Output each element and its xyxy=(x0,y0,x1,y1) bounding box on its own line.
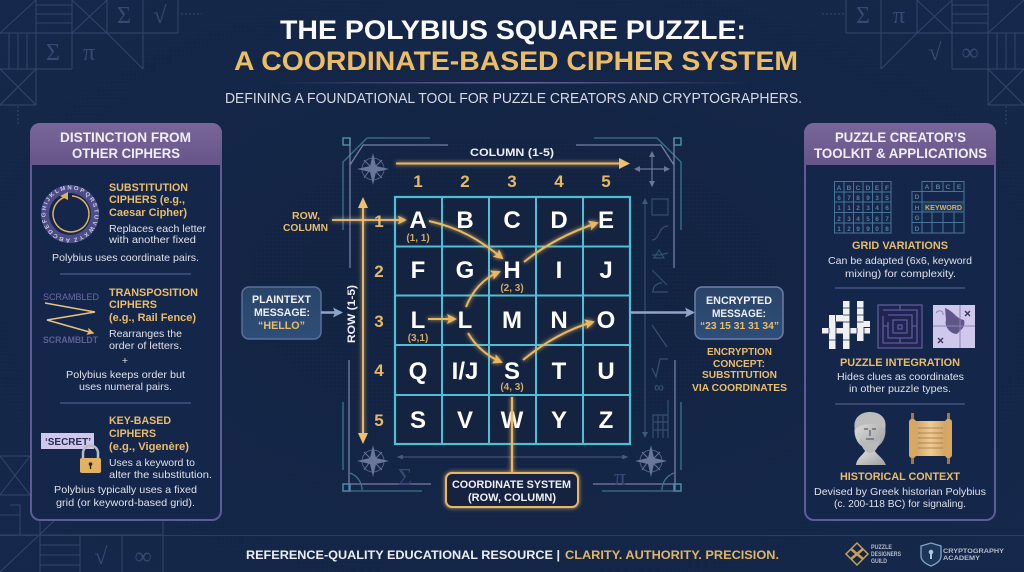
grid letters: C xyxy=(503,207,521,234)
subtitle: DEFINING A FOUNDATIONAL TOOL FOR PUZZLE CREATORS AND CRYPTOGRAPHERS. xyxy=(225,91,802,107)
grid letters: H xyxy=(503,257,521,284)
coordinate labels xyxy=(406,233,524,393)
panel header xyxy=(804,123,996,165)
icon: 6x6 grid: F xyxy=(885,185,889,192)
puzzle integration text: in other puzzle types. xyxy=(849,383,951,395)
icon: keyword grid: C xyxy=(946,184,951,191)
icon: 6x6 grid: 7 xyxy=(885,216,889,223)
coordinate system callout xyxy=(446,397,578,507)
encrypted message box: “23 15 31 31 34” xyxy=(700,320,779,332)
logo: cryptography academy: ACADEMY xyxy=(943,555,981,562)
historical context text: (c. 200-118 BC) for signaling. xyxy=(834,498,966,510)
grid letters: S xyxy=(410,407,426,434)
icon: 6x6 grid: 3 xyxy=(866,205,870,212)
row numbers: 2 xyxy=(374,262,384,281)
icon: secret keyword and padlock xyxy=(41,433,101,473)
column numbers xyxy=(413,172,611,191)
icon: 6x6 grid: 7 xyxy=(847,195,851,202)
panel header xyxy=(30,123,222,165)
icon: crossword xyxy=(822,301,870,349)
panel header: PUZZLE CREATOR’S xyxy=(835,129,966,145)
key-based ciphers text: alter the substitution. xyxy=(109,469,212,481)
icon: keyword grid: E xyxy=(957,184,962,191)
grid letters: U xyxy=(597,358,615,385)
icon: 6x6 grid: 5 xyxy=(866,216,870,223)
grid letters: B xyxy=(456,207,474,234)
title xyxy=(234,15,798,76)
corner pattern: bottom left xyxy=(0,456,163,572)
icon: 6x6 grid: 1 xyxy=(837,205,841,212)
logo: cryptography academy xyxy=(921,543,1005,566)
icon: keyword grid: A xyxy=(925,184,930,191)
coordinate labels: (3,1) xyxy=(408,333,428,344)
transposition ciphers text: uses numeral pairs. xyxy=(79,381,172,393)
icon: keyword grid: KEYWORD xyxy=(925,205,962,212)
logo: puzzle designers guild xyxy=(846,543,902,565)
icon: 6x6 grid: E xyxy=(875,185,880,192)
icon: 6x6 grid: 6 xyxy=(837,195,841,202)
row axis: ROW (1-5) xyxy=(346,285,358,343)
panel header: DISTINCTION FROM xyxy=(60,129,191,145)
key-based ciphers text: Uses a keyword to xyxy=(109,457,195,469)
row numbers xyxy=(374,212,384,430)
row numbers: 1 xyxy=(374,212,384,231)
grid letters xyxy=(409,207,615,434)
plaintext message box: PLAINTEXT xyxy=(252,294,311,306)
panel header: OTHER CIPHERS xyxy=(72,145,180,161)
footer tagline: REFERENCE-QUALITY EDUCATIONAL RESOURCE | xyxy=(246,548,560,562)
encryption concept text: SUBSTITUTION xyxy=(702,369,777,381)
row, column pointer: COLUMN xyxy=(283,222,328,234)
encrypted message box: ENCRYPTED xyxy=(706,295,772,307)
icon: 6x6 grid xyxy=(834,182,891,233)
corner pattern: top left xyxy=(0,0,202,124)
coordinate labels: (4, 3) xyxy=(500,382,524,393)
transposition ciphers text xyxy=(66,287,198,393)
row, column pointer xyxy=(283,210,405,234)
grid letters: Q xyxy=(409,358,427,385)
plaintext message box: “HELLO” xyxy=(258,320,305,332)
column numbers: 1 xyxy=(413,172,423,191)
icon: secret keyword and padlock: ‘SECRET’ xyxy=(45,436,91,448)
logo: cryptography academy: CRYPTOGRAPHY xyxy=(943,548,1005,555)
grid letters: O xyxy=(597,307,615,334)
historical context text xyxy=(814,471,986,510)
corner pattern: top right xyxy=(822,0,1024,124)
icon: keyword grid: H xyxy=(915,205,920,212)
encrypted message box xyxy=(695,287,783,339)
key-based ciphers text: grid (or keyword-based grid). xyxy=(56,497,195,509)
icon: compass top left xyxy=(357,153,389,185)
decorative frame around grid: Σ xyxy=(398,465,412,491)
icon: 6x6 grid: 6 xyxy=(885,205,889,212)
icon: keyword grid: G xyxy=(914,215,920,222)
grid letters: F xyxy=(411,257,425,284)
icon: rail fence zigzag xyxy=(43,292,99,345)
coordinate labels: (1, 1) xyxy=(406,233,430,244)
logo: puzzle designers guild: GUILD xyxy=(871,558,887,565)
icon: 6x6 grid: 3 xyxy=(875,195,879,202)
historical context text: Devised by Greek historian Polybius xyxy=(814,486,986,498)
encryption path arrows xyxy=(428,221,597,362)
logo: puzzle designers guild: PUZZLE xyxy=(871,544,893,551)
grid letters: W xyxy=(501,407,524,434)
substitution ciphers text: SUBSTITUTION xyxy=(109,182,188,194)
icon: 6x6 grid: 2 xyxy=(837,216,841,223)
icon: 6x6 grid: A xyxy=(837,185,842,192)
grid letters: I xyxy=(556,257,562,284)
grid letters: G xyxy=(456,257,474,284)
icon: rail fence zigzag: SCRAMBLDT xyxy=(43,335,98,345)
corner pattern: top right: π xyxy=(893,3,905,29)
key-based ciphers text: Polybius typically uses a fixed xyxy=(54,484,197,496)
substitution ciphers text xyxy=(52,182,206,264)
icon: keyword grid xyxy=(912,182,964,233)
decorative frame around grid xyxy=(343,138,681,491)
transposition ciphers text: order of letters. xyxy=(109,340,182,352)
icon: keyword grid: D xyxy=(915,226,920,233)
grid letters: T xyxy=(552,358,567,385)
polybius grid xyxy=(395,197,630,444)
plaintext message box xyxy=(242,287,321,339)
substitution ciphers text: Polybius uses coordinate pairs. xyxy=(52,252,199,264)
grid letters: D xyxy=(550,207,568,234)
panel: puzzle creator's toolkit xyxy=(804,123,996,520)
icon: compass bottom left xyxy=(357,445,389,477)
icon: 6x6 grid: 1 xyxy=(837,226,841,233)
encryption concept text: CONCEPT: xyxy=(713,358,765,370)
puzzle integration text: Hides clues as coordinates xyxy=(837,371,964,383)
grid letters: Y xyxy=(551,407,567,434)
corner pattern: top right: √ xyxy=(928,40,942,66)
column axis xyxy=(396,147,630,169)
row numbers: 5 xyxy=(374,411,384,430)
icon: 6x6 grid: C xyxy=(856,185,861,192)
icon: keyword grid: D xyxy=(915,194,920,201)
row numbers: 3 xyxy=(374,312,384,331)
grid variations text: Can be adapted (6x6, keyword xyxy=(828,255,972,267)
footer tagline: CLARITY. AUTHORITY. PRECISION. xyxy=(565,548,779,562)
corner pattern: top right: Σ xyxy=(856,3,870,29)
icon: 6x6 grid: 2 xyxy=(847,226,851,233)
icon: jigsaw xyxy=(933,305,975,348)
decorative frame around grid: π xyxy=(614,465,626,491)
corner pattern: top right: ∞ xyxy=(961,40,979,66)
historical context text: HISTORICAL CONTEXT xyxy=(840,471,960,483)
coordinate labels: (2, 3) xyxy=(500,283,524,294)
icon: 6x6 grid: 9 xyxy=(866,195,870,202)
icon: polybius bust xyxy=(854,412,886,465)
icon: 6x6 grid: 9 xyxy=(866,226,870,233)
grid variations text: GRID VARIATIONS xyxy=(852,240,948,252)
substitution ciphers text: CIPHERS (e.g., xyxy=(109,194,185,206)
corner pattern: bottom left: √ xyxy=(94,544,108,570)
icon: 6x6 grid: 1 xyxy=(847,205,851,212)
panel header: TOOLKIT & APPLICATIONS xyxy=(814,145,987,161)
corner pattern: top left: π xyxy=(83,40,95,66)
row, column pointer: ROW, xyxy=(292,210,320,222)
column numbers: 4 xyxy=(554,172,564,191)
transposition ciphers text: + xyxy=(122,355,128,367)
substitution ciphers text: Replaces each letter xyxy=(109,223,206,235)
column axis: COLUMN (1-5) xyxy=(470,147,554,159)
grid letters: L xyxy=(411,307,425,334)
coordinate system callout: (ROW, COLUMN) xyxy=(468,492,556,504)
key-based ciphers text: KEY-BASED xyxy=(109,415,171,427)
footer rule xyxy=(0,535,1024,536)
substitution ciphers text: Caesar Cipher) xyxy=(109,207,187,219)
plaintext message box: MESSAGE: xyxy=(254,307,310,319)
grid variations text xyxy=(828,240,972,280)
substitution ciphers text: with another fixed xyxy=(108,234,196,246)
corner pattern: bottom left: ∞ xyxy=(134,544,152,570)
decorative geometry icons right of grid: ∞ xyxy=(654,379,664,395)
icon: scroll xyxy=(909,413,952,464)
column numbers: 2 xyxy=(460,172,470,191)
grid letters: N xyxy=(550,307,568,334)
row axis xyxy=(346,197,368,444)
decorative geometry icons right of grid xyxy=(642,198,668,438)
corner pattern: top left: √ xyxy=(153,3,167,29)
icon: 6x6 grid: 0 xyxy=(875,226,879,233)
key-based ciphers text xyxy=(54,415,212,509)
row numbers: 4 xyxy=(374,361,384,380)
arrow: grid to encrypted message xyxy=(630,311,693,314)
grid letters: Z xyxy=(599,407,613,434)
footer tagline xyxy=(246,548,779,562)
icon: 6x6 grid: 2 xyxy=(856,205,860,212)
title: A COORDINATE-BASED CIPHER SYSTEM xyxy=(234,46,798,76)
transposition ciphers text: Polybius keeps order but xyxy=(66,369,185,381)
transposition ciphers text: CIPHERS xyxy=(109,299,157,311)
puzzle integration text: PUZZLE INTEGRATION xyxy=(840,357,960,369)
icon: 6x6 grid: 3 xyxy=(847,216,851,223)
transposition ciphers text: TRANSPOSITION xyxy=(109,287,198,299)
grid letters: L xyxy=(458,307,472,334)
icon: cipher wheel: ABCDEFGHIJKLMNOPQRSTUVWXYZ xyxy=(41,185,99,243)
encrypted message box: MESSAGE: xyxy=(712,308,766,320)
icon: 6x6 grid: 5 xyxy=(885,195,889,202)
column numbers: 3 xyxy=(507,172,517,191)
encryption concept text: VIA COORDINATES xyxy=(692,382,787,394)
puzzle integration text xyxy=(837,357,964,395)
coordinate system callout: COORDINATE SYSTEM xyxy=(452,479,571,491)
corner pattern: top left: Σ xyxy=(46,40,60,66)
icon: 6x6 grid: 6 xyxy=(875,216,879,223)
encryption concept text: ENCRYPTION xyxy=(707,346,772,358)
grid letters: I/J xyxy=(452,358,478,385)
grid letters: A xyxy=(409,207,427,234)
panel: distinction from other ciphers xyxy=(30,123,222,521)
icon: keyword grid: B xyxy=(936,184,941,191)
encryption concept text xyxy=(692,346,787,394)
icon: 6x6 grid: 4 xyxy=(856,216,860,223)
icon: maze xyxy=(878,305,922,348)
grid letters: M xyxy=(502,307,522,334)
title: THE POLYBIUS SQUARE PUZZLE: xyxy=(280,15,746,45)
icon: rail fence zigzag: SCRAMBLED xyxy=(43,292,99,302)
icon: 6x6 grid: 4 xyxy=(875,205,879,212)
arrow: plaintext to grid xyxy=(321,311,341,314)
icon: four-way arrows xyxy=(634,151,670,187)
icon: 6x6 grid: D xyxy=(866,185,871,192)
transposition ciphers text: (e.g., Rail Fence) xyxy=(109,312,196,324)
column numbers: 5 xyxy=(601,172,611,191)
transposition ciphers text: Rearranges the xyxy=(109,328,182,340)
grid letters: S xyxy=(504,358,520,385)
icon: 6x6 grid: 9 xyxy=(856,226,860,233)
grid letters: E xyxy=(598,207,614,234)
grid letters: J xyxy=(599,257,613,284)
icon: 6x6 grid: 8 xyxy=(856,195,860,202)
grid letters: V xyxy=(457,407,473,434)
key-based ciphers text: (e.g., Vigenère) xyxy=(109,441,189,453)
icon: compass bottom right xyxy=(635,445,667,477)
icon: 6x6 grid: B xyxy=(847,185,852,192)
logo: puzzle designers guild: DESIGNERS xyxy=(871,551,902,558)
grid variations text: mixing) for complexity. xyxy=(845,268,956,280)
key-based ciphers text: CIPHERS xyxy=(109,428,156,440)
corner pattern: top left: Σ xyxy=(117,3,131,29)
icon: 6x6 grid: 8 xyxy=(885,226,889,233)
